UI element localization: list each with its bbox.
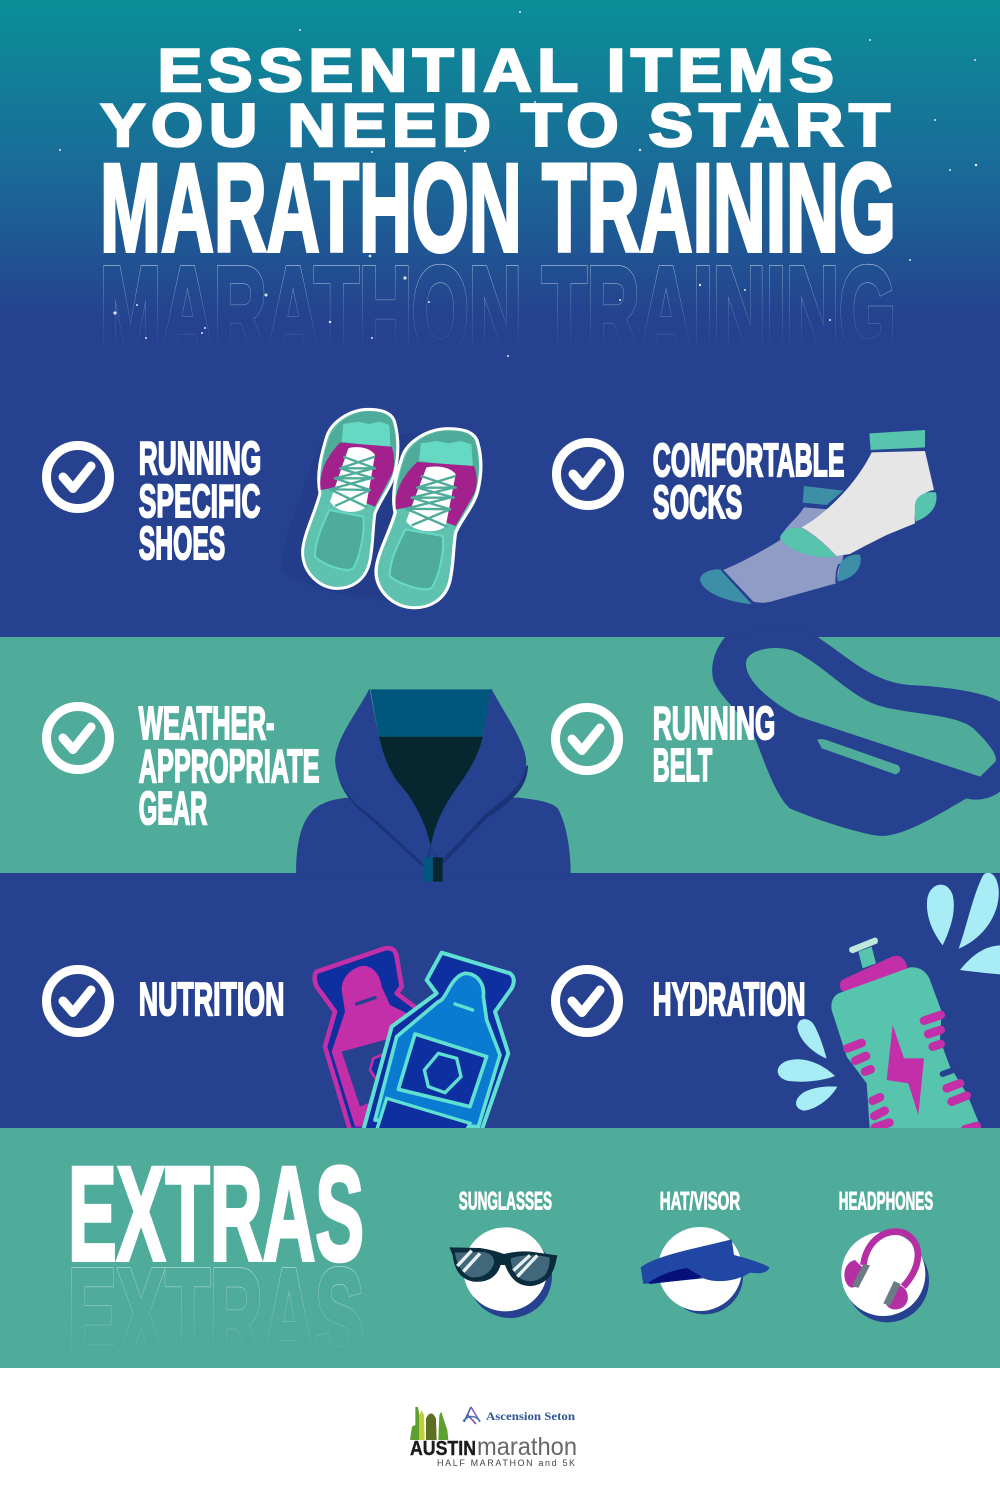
extra: hat or visor: HAT/VISOR <box>660 1187 740 1215</box>
icon: running belt <box>712 627 1000 836</box>
logo: Ascension Seton and Austin Marathon <box>410 1407 577 1468</box>
item: running specific shoes: RUNNING <box>139 432 261 484</box>
icon: headphones <box>841 1232 929 1322</box>
background: teal band gear and belt <box>0 637 1000 873</box>
text: marathon: marathon <box>477 1433 577 1461</box>
extra: headphones <box>839 1187 933 1322</box>
item: hydration <box>556 873 1000 1133</box>
check icon <box>46 706 110 770</box>
item: running specific shoes: SHOES <box>139 517 225 569</box>
label: GEAR <box>139 782 207 834</box>
title: ESSENTIAL ITEMS <box>158 37 834 104</box>
icon: visor <box>641 1227 769 1314</box>
text: SUNGLASSES <box>459 1187 552 1215</box>
item: running specific shoes: SPECIFIC <box>139 475 260 527</box>
item: running specific shoes <box>46 409 481 608</box>
icon: Ascension mark <box>463 1407 480 1424</box>
text: Ascension Seton: Ascension Seton <box>486 1411 576 1423</box>
background: blue band nutrition and hydration <box>0 873 1000 1128</box>
check icon <box>556 442 620 506</box>
icon: running shoes <box>282 409 481 608</box>
label <box>139 697 319 834</box>
check icon <box>556 970 618 1032</box>
heading: extras outline echo <box>68 1241 364 1391</box>
check icon <box>46 970 110 1032</box>
check icon <box>556 708 618 770</box>
text: half marathon and 5K: HALF MARATHON and 5K <box>437 1458 575 1468</box>
title: YOU NEED TO START <box>100 92 890 159</box>
icon: skyline <box>410 1407 448 1440</box>
item: comfortable socks <box>556 430 937 604</box>
item: running belt <box>556 697 775 791</box>
item: nutrition <box>46 948 514 1130</box>
background: teal band extras <box>0 1128 1000 1368</box>
icon: socks <box>700 430 937 604</box>
label <box>653 697 775 791</box>
extra: sunglasses <box>449 1187 557 1318</box>
text: BELT <box>653 739 712 791</box>
item: weather-appropriate gear <box>46 688 571 882</box>
item: nutrition: NUTRITION <box>139 973 284 1025</box>
icon: jacket <box>296 688 571 882</box>
background: blue band shoes and socks <box>0 380 1000 637</box>
label <box>139 432 261 569</box>
item: weather-appropriate gear: APPROPRIATE <box>139 740 319 792</box>
check icon <box>46 446 110 508</box>
extra: hat or visor <box>641 1187 769 1314</box>
icon: energy gel packets <box>315 948 514 1130</box>
label <box>653 434 844 528</box>
title <box>100 37 896 278</box>
icon: water bottle with splashes <box>778 873 1000 1133</box>
text: Austin: AUSTIN <box>410 1438 476 1460</box>
background: header gradient <box>0 0 1000 380</box>
icon: sunglasses <box>449 1227 557 1318</box>
item: weather-appropriate gear: WEATHER- <box>139 697 275 749</box>
background: white footer <box>0 1368 1000 1500</box>
